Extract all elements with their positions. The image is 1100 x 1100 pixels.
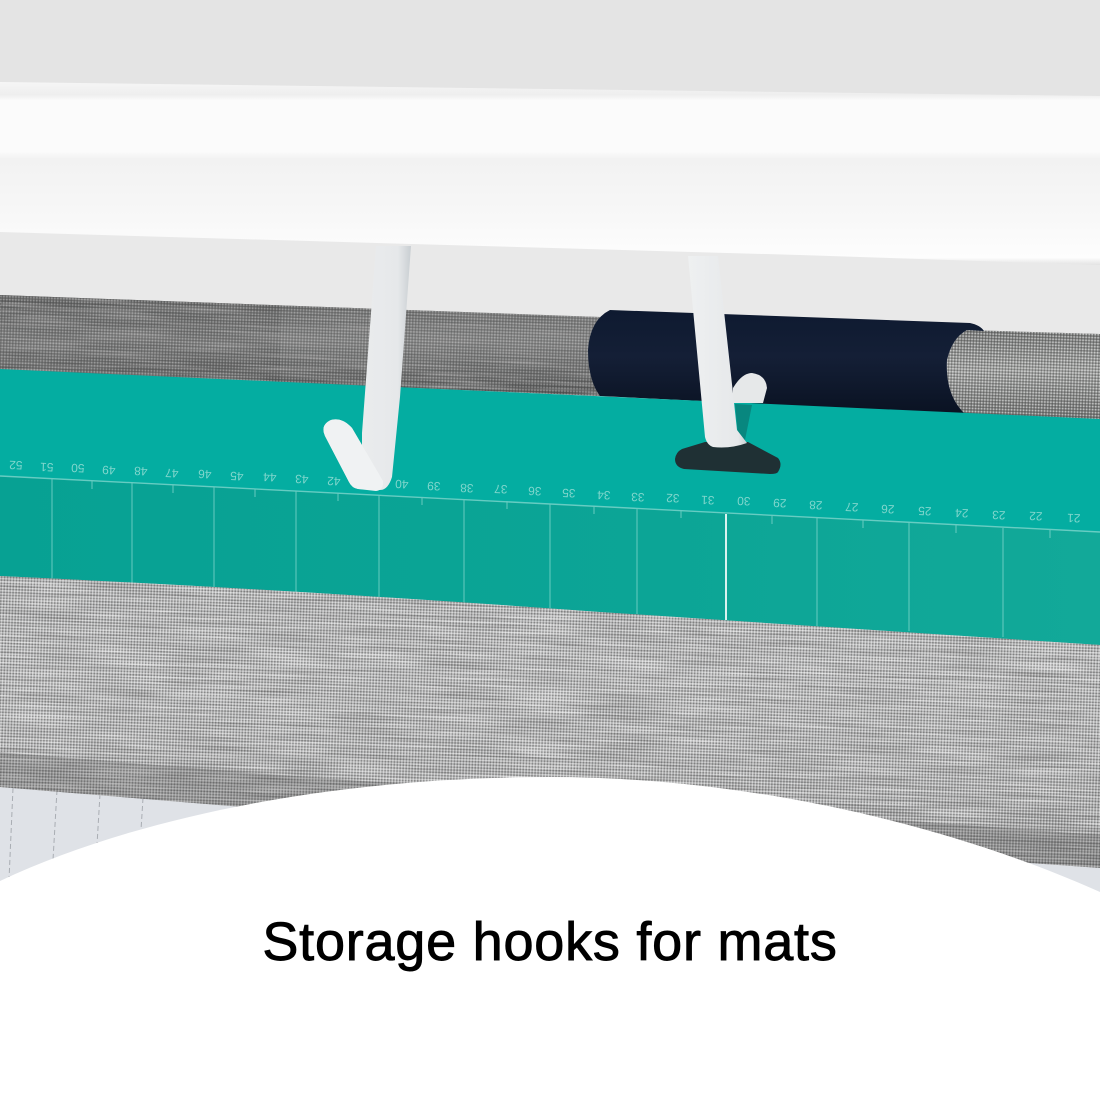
hook strap <box>688 256 747 448</box>
ruler numbers: 44 <box>263 470 277 484</box>
ruler numbers: 31 <box>701 493 715 507</box>
ruler numbers <box>9 458 1081 525</box>
hook tip <box>733 373 767 403</box>
ruler numbers: 30 <box>737 494 751 508</box>
ruler numbers: 39 <box>427 479 441 493</box>
mat peeking below fabric <box>0 780 1100 910</box>
ruler numbers: 50 <box>71 461 85 475</box>
ruler numbers: 25 <box>918 504 932 518</box>
ruler numbers: 51 <box>40 460 54 474</box>
ruler numbers: 34 <box>597 488 611 502</box>
ruler numbers: 52 <box>9 458 23 472</box>
grey fabric roll (back left) <box>0 295 600 396</box>
foreground grey fabric panel <box>0 576 1100 868</box>
ruler numbers: 28 <box>809 498 823 512</box>
navy strap around roll <box>588 310 984 414</box>
grey fabric roll (back right) <box>946 330 1100 419</box>
ruler numbers: 48 <box>134 464 148 478</box>
ruler numbers: 36 <box>528 484 542 498</box>
ruler numbers: 43 <box>295 472 309 486</box>
ruler numbers: 23 <box>992 508 1006 522</box>
teal cutting mat <box>0 369 1100 645</box>
ruler numbers: 49 <box>102 463 116 477</box>
mount <box>675 442 780 474</box>
ruler numbers: 40 <box>395 477 409 491</box>
left storage hook <box>323 246 411 491</box>
ruler numbers: 22 <box>1029 509 1043 523</box>
ruler numbers: 29 <box>773 496 787 510</box>
ruler numbers: 32 <box>666 491 680 505</box>
ruler scale on mat <box>0 476 1100 637</box>
ruler numbers: 38 <box>460 481 474 495</box>
ruler numbers: 45 <box>230 469 244 483</box>
right storage hook with mount <box>675 256 780 474</box>
ruler numbers: 21 <box>1067 511 1081 525</box>
white shelf bar <box>0 82 1100 265</box>
ruler numbers: 46 <box>198 467 212 481</box>
ruler numbers: 26 <box>881 502 895 516</box>
hook shadow on mat <box>735 404 752 440</box>
ruler numbers: 42 <box>327 474 341 488</box>
ruler numbers: 47 <box>165 466 179 480</box>
ruler numbers: 33 <box>631 490 645 504</box>
ruler numbers: 37 <box>494 482 508 496</box>
caption text: Storage hooks for mats <box>262 912 838 972</box>
ruler numbers: 27 <box>845 500 859 514</box>
ruler numbers: 24 <box>955 506 969 520</box>
ruler numbers: 35 <box>562 486 576 500</box>
